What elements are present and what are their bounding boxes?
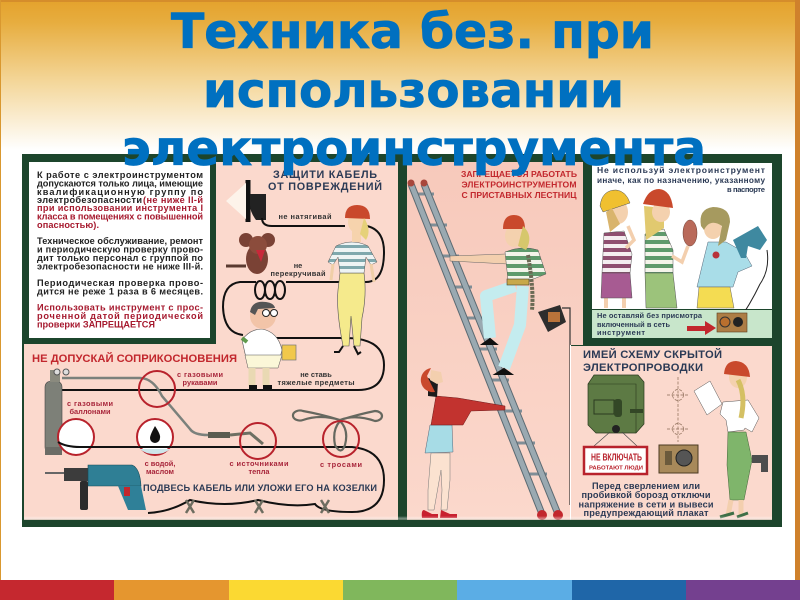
panel: operator rules: класса в помещениях с повышенной — [37, 212, 203, 222]
panel: operator rules: дит только персонал с группой по — [37, 253, 203, 263]
caption: heat — [230, 459, 289, 476]
divider — [570, 345, 572, 520]
text: before drilling: пробивкой борозд отключи — [582, 490, 711, 500]
warning: hoses — [139, 371, 175, 407]
illustration: wire rope — [293, 410, 382, 450]
caption: ropes: с тросами — [320, 460, 362, 469]
illustration: junction box — [588, 375, 644, 446]
caption: hoses: рукавами — [183, 378, 218, 387]
arrow — [687, 321, 716, 335]
heading: hidden wiring plan: ЭЛЕКТРОПРОВОДКИ — [583, 362, 703, 374]
heading: protect the cable: ОТ ПОВРЕЖДЕНИЙ — [268, 180, 382, 193]
icon: wall socket — [717, 313, 747, 332]
panel: operator rules: Использовать инструмент с прос- — [37, 302, 203, 312]
warning: ropes — [323, 421, 359, 457]
warning: heat sources — [240, 423, 276, 459]
illustration: ladder — [408, 180, 563, 520]
caption: do not twist — [270, 261, 326, 278]
heading: ladder warning: ЭЛЕКТРОИНСТРУМЕНТОМ — [462, 180, 576, 190]
text: unattended warning: инструмент — [597, 328, 645, 337]
panel: ladder warning — [407, 162, 583, 520]
caption: cylinders — [67, 399, 113, 416]
rainbow footer stripe — [0, 580, 800, 600]
panel: operator rules: проверки ЗАПРЕЩАЕТСЯ — [37, 320, 155, 330]
caption: heat: тепла — [248, 467, 270, 476]
warning: water and oil — [137, 419, 173, 455]
sign: do not switch on: НЕ ВКЛЮЧАТЬ — [591, 452, 642, 464]
panel: hidden wiring plan — [571, 346, 772, 520]
cable route — [46, 218, 384, 513]
panel: operator rules: электробезопасности — [37, 195, 142, 205]
text: unattended warning — [597, 311, 703, 337]
caption: do not place heavy objects — [278, 370, 354, 387]
panel: operator rules: квалификационную группу по — [37, 187, 203, 197]
panel: operator rules: электробезопасности не ниже III-й. — [37, 262, 203, 272]
caption: do not twist: не — [294, 261, 302, 270]
panel: operator rules: дится не реже 1 раза в 6 месяцев. — [37, 286, 203, 296]
heading: hidden wiring plan: ИМЕЙ СХЕМУ СКРЫТОЙ — [583, 348, 722, 361]
illustration: woman with wiring plan — [694, 361, 768, 517]
strip: do not leave unattended — [592, 310, 772, 338]
panel: operator rules: (не ниже II-й — [143, 195, 203, 205]
heading: protect the cable — [268, 169, 382, 193]
illustration: gas torch and hose — [62, 378, 263, 444]
illustration: woman with drill as hair dryer — [697, 207, 768, 323]
warning: cylinders — [58, 419, 94, 455]
panel: operator rules: Периодическая проверка прово- — [37, 278, 203, 288]
heading: protect the cable: ЗАЩИТИ КАБЕЛЬ — [273, 169, 377, 181]
caption: hoses: с газовыми — [177, 370, 223, 379]
illustration: man standing on cable — [242, 302, 296, 387]
heading: ladder warning: С ПРИСТАВНЫХ ЛЕСТНИЦ — [462, 190, 577, 200]
caption: do not place heavy objects: тяжелые предметы — [278, 378, 354, 387]
panel: operator rules: допускаются только лица, имеющие — [37, 178, 203, 188]
caption: cylinders: баллонами — [69, 407, 111, 416]
caption: water: с водой, — [145, 459, 175, 468]
caption: do not twist: перекручивай — [270, 269, 326, 278]
illustration: mouse — [226, 233, 275, 274]
heading: avoid contact: НЕ ДОПУСКАЙ СОПРИКОСНОВЕНИЯ — [32, 352, 237, 365]
sign: do not switch on: РАБОТАЮТ ЛЮДИ — [589, 466, 643, 472]
icon: socket and switch — [659, 445, 698, 473]
icon: plug and socket — [226, 180, 266, 222]
panel: operator rules: при использовании инструмента I — [37, 203, 203, 213]
text: use tool as intended: иначе, как по назначению, указанному — [597, 176, 765, 185]
illustration: woman on ladder — [450, 215, 570, 505]
panel: operator rules — [29, 162, 210, 338]
text: unattended warning: включенный в сеть — [597, 320, 670, 329]
caption: hoses — [177, 370, 223, 387]
heading: ladder warning: ЗАПРЕЩАЕТСЯ РАБОТАТЬ — [461, 169, 577, 179]
cable coil — [255, 281, 285, 299]
text: before drilling — [578, 481, 714, 518]
panel: operator rules: К работе с электроинструментом — [37, 170, 203, 180]
safety poster — [22, 154, 782, 527]
caption: cylinders: с газовыми — [67, 399, 113, 408]
title — [122, 4, 706, 177]
heading: suspend the cable: ПОДВЕСЬ КАБЕЛЬ ИЛИ УЛОЖИ ЕГО НА КОЗЕЛКИ — [143, 483, 377, 493]
panel: use as intended — [592, 163, 772, 338]
sign: do not switch on — [584, 447, 647, 474]
heading: ladder warning — [461, 169, 577, 200]
illustration: woman with cable around neck — [328, 205, 377, 354]
panel: protect the cable — [24, 162, 398, 520]
illustration: woman holding ladder — [421, 368, 505, 518]
text: use tool as intended: Не используй электроинструмент — [597, 165, 765, 175]
poster bottom fade — [24, 516, 772, 520]
icon: wiring scheme marks — [667, 377, 689, 442]
title: электроинструмента — [122, 121, 706, 177]
title: использовании — [203, 63, 624, 119]
panel: operator rules: Техническое обслуживание, ремонт — [37, 236, 204, 246]
illustration: drill — [45, 465, 146, 510]
heading: hidden wiring plan — [583, 348, 722, 374]
text: before drilling: предупреждающий плакат — [584, 508, 709, 518]
caption: water — [145, 459, 175, 476]
text: before drilling: Перед сверлением или — [592, 481, 700, 491]
panel: operator rules: и периодическую проверку прово- — [37, 244, 203, 254]
text: before drilling: напряжение в сети и вывеси — [578, 500, 714, 510]
icon: cable trestles — [186, 500, 329, 513]
illustration: woman with drill as mirror — [643, 189, 697, 308]
caption: do not pull: не натягивай — [278, 212, 332, 221]
text: unattended warning: Не оставляй без присмотра — [597, 311, 703, 320]
panel: operator rules: опасностью). — [37, 220, 99, 230]
text: use tool as intended — [597, 165, 765, 194]
title: Техника без. при — [171, 4, 654, 60]
illustration: woman with drill as lipstick — [600, 190, 634, 308]
text: use tool as intended: в паспорте — [727, 185, 765, 194]
caption: heat: с источниками — [230, 459, 289, 468]
illustration: gas cylinder — [45, 369, 69, 455]
caption: do not place heavy objects: не ставь — [300, 370, 332, 379]
caption: water: маслом — [146, 467, 174, 476]
panel: operator rules: роченной датой периодической — [37, 311, 203, 321]
